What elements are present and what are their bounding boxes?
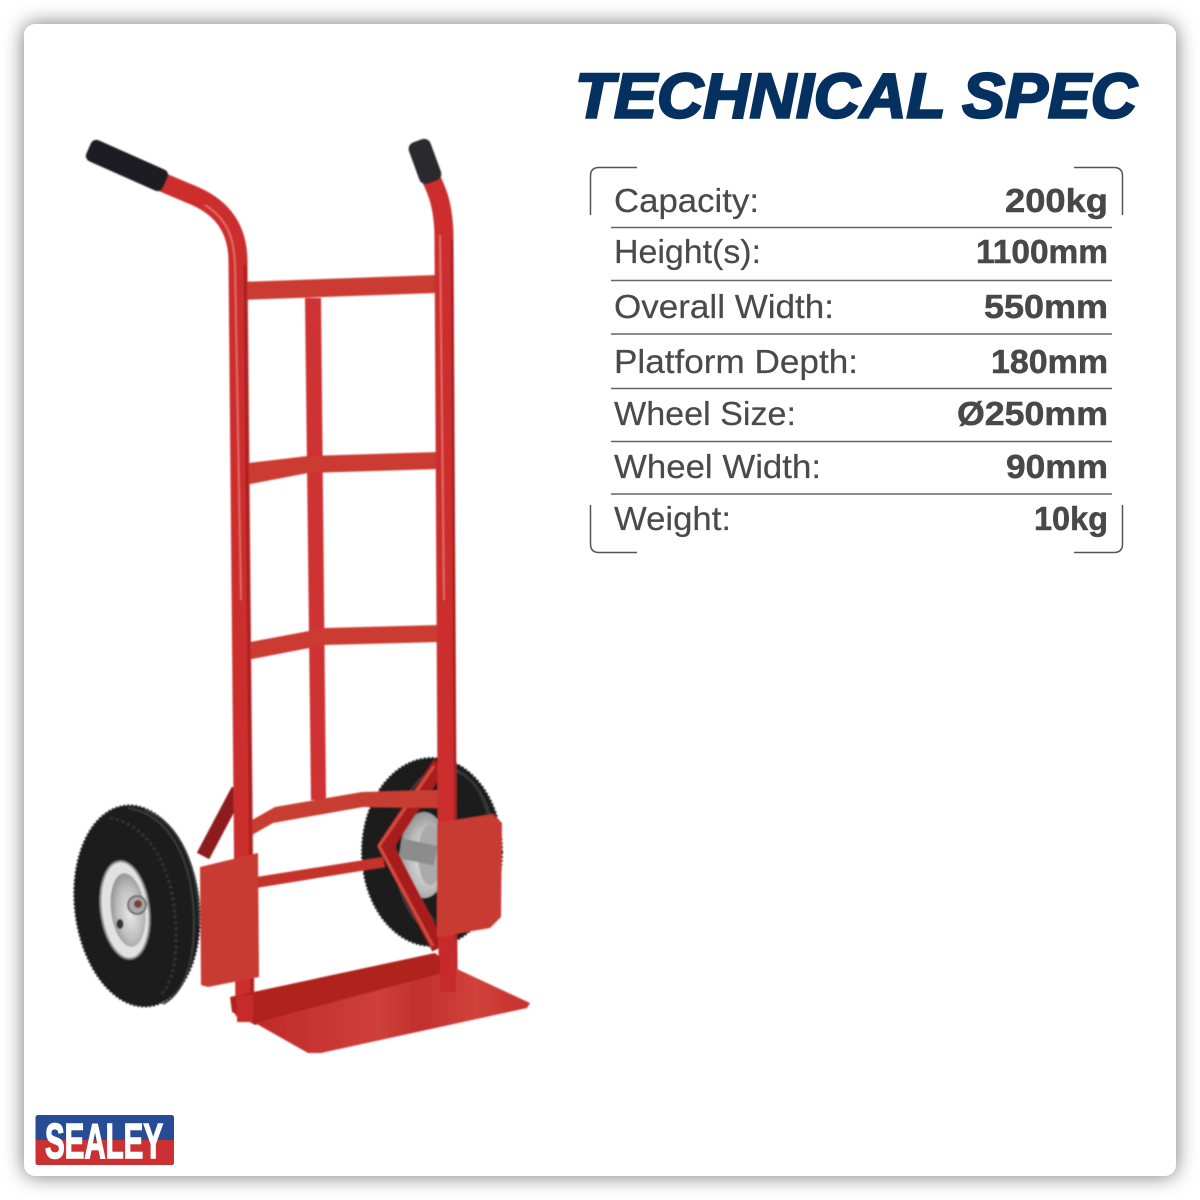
row: height: Height(s): [614, 233, 761, 270]
row: capacity: 200kg [1005, 182, 1108, 219]
row: height [614, 233, 1108, 270]
row: wheel width [614, 448, 1108, 485]
row: wheel width: Wheel Width: [614, 448, 821, 485]
left plate [200, 853, 259, 987]
right wheel [362, 758, 502, 946]
product photo: red sack truck [63, 137, 530, 1053]
crossbar 4 [245, 790, 440, 839]
row: capacity: Capacity: [614, 182, 759, 219]
row: wheel size: Ø250mm [957, 395, 1108, 432]
spec table [590, 168, 1122, 552]
right tube [427, 170, 456, 973]
brace: right wheel bracket [379, 764, 440, 948]
right plate [437, 814, 502, 937]
row: wheel size [614, 395, 1108, 432]
vertical centre bar [305, 298, 326, 800]
title: TECHNICAL SPEC [575, 62, 1139, 132]
row: overall width [614, 288, 1108, 325]
row: overall width: 550mm [984, 288, 1108, 325]
row: height: 1100mm [976, 233, 1108, 270]
crossbar 3 [245, 625, 440, 660]
left grip [84, 138, 170, 193]
row: overall width: Overall Width: [614, 288, 834, 325]
crossbar 1 [240, 275, 436, 300]
row: capacity [614, 182, 1108, 219]
left wheel [63, 798, 211, 1014]
top brackets [590, 168, 1122, 215]
row: weight: Weight: [614, 500, 731, 537]
right grip [407, 137, 443, 186]
row: platform depth [614, 343, 1108, 380]
row: platform depth: Platform Depth: [614, 343, 858, 380]
lower crossbar [250, 857, 385, 889]
row: weight [614, 500, 1108, 537]
row: wheel size: Wheel Size: [614, 395, 796, 432]
logo: Sealey [36, 1115, 174, 1169]
bottom brackets [590, 505, 1122, 552]
row: platform depth: 180mm [991, 343, 1108, 380]
crossbar 2 [240, 452, 439, 486]
row: weight: 10kg [1034, 500, 1108, 537]
logo: Sealey: SEALEY [45, 1115, 163, 1169]
left tube [150, 177, 252, 1016]
brace: left wheel strut [203, 790, 238, 856]
platform [230, 937, 530, 1053]
row: wheel width: 90mm [1006, 448, 1108, 485]
